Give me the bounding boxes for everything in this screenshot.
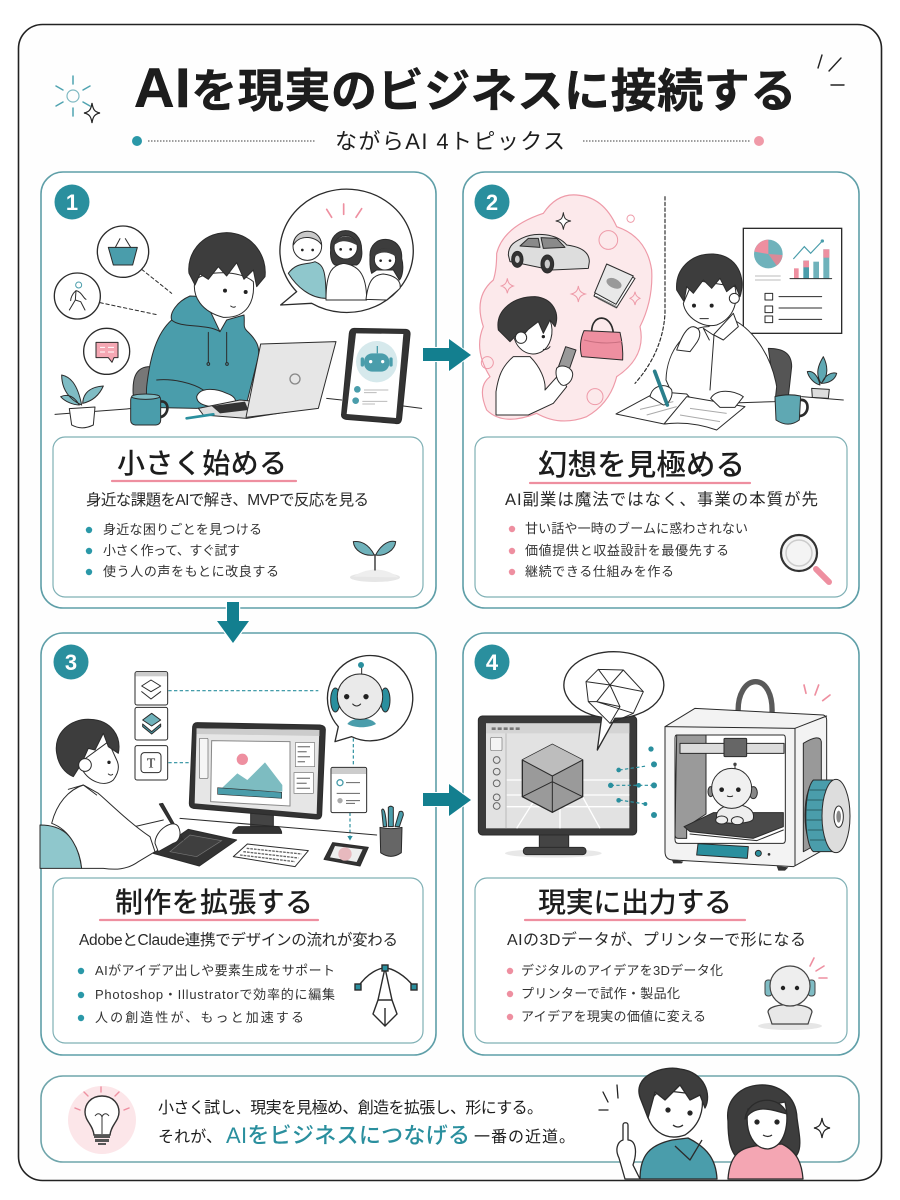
underline <box>112 480 296 482</box>
badge 4: 4 <box>486 650 499 675</box>
3D printer <box>665 682 827 871</box>
bullets 2: 甘い話や一時のブームに惑わされない <box>525 521 748 536</box>
summary 4: AIの3Dデータが、プリンターで形になる <box>507 930 806 949</box>
underline <box>525 919 745 921</box>
illustration 1 <box>54 189 422 428</box>
heading 3: 制作を拡張する <box>115 887 313 918</box>
icon: pen tool <box>355 965 417 1026</box>
robot bubble <box>327 656 413 742</box>
money <box>594 264 635 308</box>
badge 2: 2 <box>486 190 498 215</box>
icon: basket <box>97 226 149 277</box>
content box 2 <box>475 437 847 597</box>
heading 1: 小さく始める <box>117 448 287 479</box>
bullets 4 <box>507 963 723 1024</box>
bullets 4: プリンターで試作・製品化 <box>521 986 680 1001</box>
car <box>508 234 589 273</box>
tablet with robot <box>342 328 410 424</box>
bullets 3: AIがアイデア出しや要素生成をサポート <box>95 963 335 978</box>
icon: small robot <box>758 958 827 1030</box>
arrow: panel 1 to panel 3 <box>217 602 249 643</box>
dashed divider <box>635 197 665 383</box>
bullets 2: 価値提供と収益設計を最優先する <box>525 543 729 558</box>
icon: light bulb <box>68 1086 136 1154</box>
tool cards <box>135 672 168 780</box>
plant <box>61 375 103 428</box>
bullets 1: 小さく作って、すぐ試す <box>103 543 240 558</box>
bullets 3: Photoshop・Illustratorで効率的に編集 <box>95 987 335 1002</box>
polyhedron bubble <box>564 652 664 750</box>
icon: sparkle <box>814 1118 830 1138</box>
subtitle row: ながらAI 4トピックス <box>335 129 565 154</box>
badge 1: 1 <box>66 190 78 215</box>
badge 4 <box>474 644 510 680</box>
person with phone <box>496 297 576 415</box>
bullets 3 <box>78 963 335 1025</box>
panel 1 <box>41 172 436 608</box>
data dots <box>608 746 657 818</box>
arrow: panel 3 to panel 4 <box>423 784 471 816</box>
bullets 1 <box>86 522 279 579</box>
panel 4 frame <box>463 633 859 1055</box>
footer line 1: 小さく試し、現実を見極め、創造を拡張し、形にする。 <box>158 1099 543 1117</box>
panel 2 frame <box>463 172 859 608</box>
icon: walking person <box>54 273 100 319</box>
chair <box>768 348 792 397</box>
badge 2 <box>474 184 510 220</box>
chart board <box>743 228 842 333</box>
icon: chat <box>84 328 130 374</box>
filament spool <box>805 779 850 853</box>
chair <box>133 367 152 397</box>
icon: spark lines <box>599 1085 618 1110</box>
boy <box>617 1068 717 1179</box>
icon: magnifier <box>781 535 829 582</box>
heading 4: 現実に出力する <box>538 887 732 918</box>
heading 2: 幻想を見極める <box>538 449 745 482</box>
footer line 2: それが、 <box>158 1128 222 1146</box>
panel 3 <box>40 633 436 1055</box>
underline <box>530 482 750 484</box>
bullets 2: 継続できる仕組みを作る <box>525 564 674 579</box>
laptop <box>187 342 336 418</box>
monitor <box>478 716 637 858</box>
title: AIを現実のビジネスに接続する <box>134 55 797 121</box>
speech bubble <box>280 189 413 312</box>
person with hoodie <box>146 233 265 408</box>
mug <box>131 394 167 425</box>
monitor <box>189 723 325 833</box>
footer frame <box>41 1076 859 1162</box>
badge 3 <box>54 644 88 680</box>
icon: spark lines <box>818 55 844 85</box>
keyboard <box>233 844 308 867</box>
illustration 2 <box>480 195 843 430</box>
small tablet <box>324 843 368 866</box>
icon: seedling <box>350 541 400 582</box>
dream cloud <box>480 195 652 421</box>
bullets 4: デジタルのアイデアを3Dデータ化 <box>521 963 723 978</box>
content box 1 <box>53 437 423 597</box>
plant and mug <box>775 357 843 424</box>
pen cup <box>380 806 403 856</box>
panel 4 <box>463 633 859 1055</box>
bullets 3: 人の創造性が、もっと加速する <box>95 1010 304 1025</box>
chair <box>40 825 82 868</box>
illustration 3 <box>40 656 413 869</box>
layers card <box>120 767 377 841</box>
thinking man <box>666 254 777 403</box>
subtitle row <box>132 129 764 154</box>
footer line 2: AIをビジネスにつなげる <box>226 1123 470 1148</box>
bullets 2 <box>509 521 748 579</box>
icon: sun and sparkle <box>56 76 100 123</box>
pen tablet <box>153 829 237 866</box>
footer line 2: 一番の近道。 <box>474 1128 575 1146</box>
bullets 1: 身近な困りごとを見つける <box>103 522 262 537</box>
badge 1 <box>54 184 90 220</box>
footer panel <box>41 1068 859 1179</box>
panel 2 <box>463 172 859 608</box>
girl <box>728 1085 803 1179</box>
panel 1 frame <box>41 172 436 608</box>
panel 3 frame <box>41 633 436 1055</box>
content box 4 <box>475 878 847 1043</box>
artist <box>52 719 183 869</box>
tool cards: T <box>147 756 156 771</box>
notebook <box>616 371 745 430</box>
summary 2: AI副業は魔法ではなく、事業の本質が先 <box>505 490 818 509</box>
badge 3: 3 <box>65 650 77 675</box>
bullets 1: 使う人の声をもとに改良する <box>103 564 279 579</box>
robot model <box>708 763 757 825</box>
footer line 2 <box>158 1123 575 1148</box>
summary 1: 身近な課題をAIで解き、MVPで反応を見る <box>86 491 369 509</box>
bullets 4: アイデアを現実の価値に変える <box>521 1009 706 1024</box>
underline <box>100 919 318 921</box>
summary 3: AdobeとClaude連携でデザインの流れが変わる <box>79 930 398 949</box>
handbag <box>580 318 623 360</box>
content box 3 <box>53 878 423 1043</box>
arrow: panel 1 to panel 2 <box>423 339 471 371</box>
illustration 4 <box>478 652 850 871</box>
